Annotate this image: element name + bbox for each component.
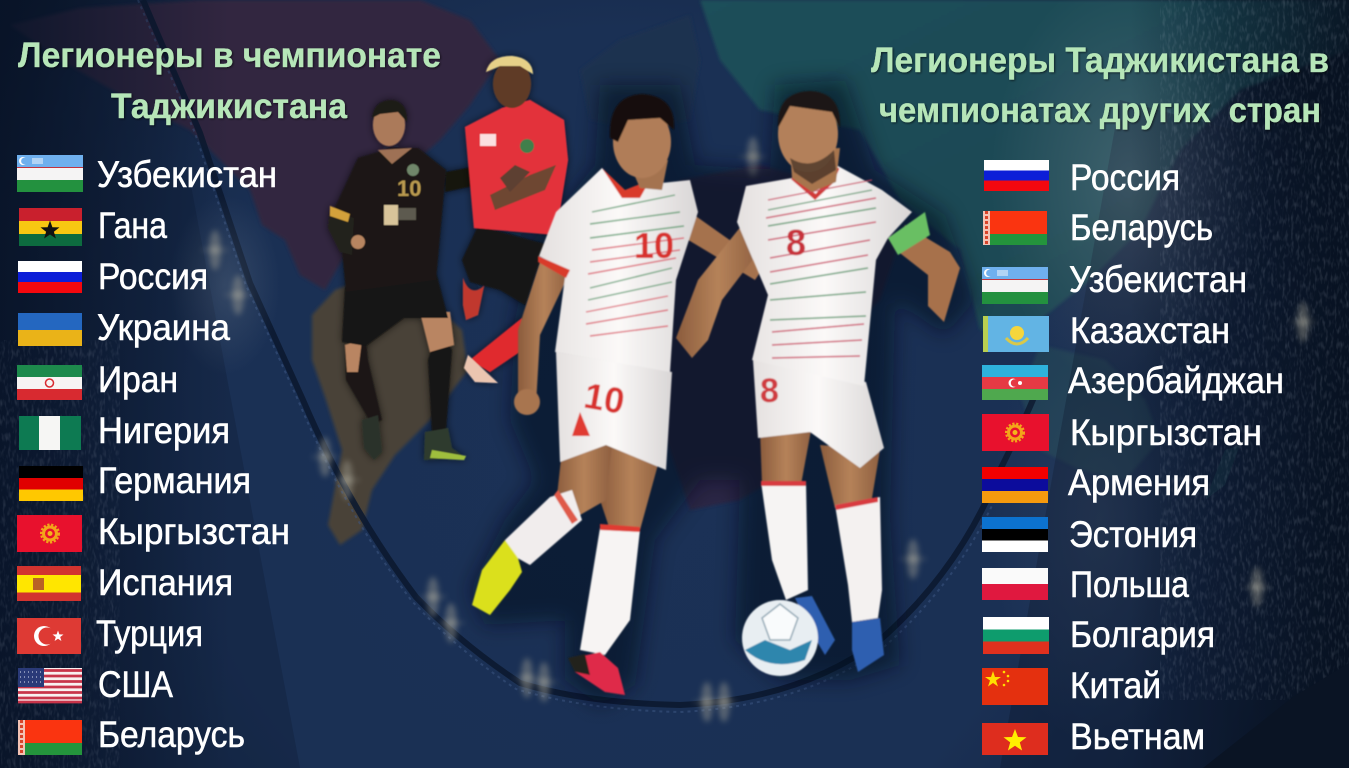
row: Турция: Турция [96, 613, 203, 654]
row: Испания [17, 562, 233, 603]
row: Эстония [982, 514, 1197, 555]
flag: Ukraine [18, 313, 82, 346]
player: red kit [462, 56, 568, 383]
flag: Spain [17, 566, 81, 601]
player: number 8 white kit: 8 [786, 222, 806, 263]
row: Азербайджан: Азербайджан [1068, 360, 1284, 401]
haze [990, 0, 1270, 390]
row: Гана: Гана [98, 205, 167, 246]
row: Китай: Китай [1070, 665, 1161, 706]
row: Казахстан [983, 310, 1230, 352]
row: Болгария [983, 614, 1215, 655]
map: South America [312, 275, 468, 545]
row: Кыргызстан: Кыргызстан [98, 511, 290, 552]
football [742, 600, 818, 676]
flag: Uzbekistan [982, 267, 1048, 304]
row: Узбекистан: Узбекистан [97, 154, 277, 195]
row: Польша: Польша [1070, 564, 1189, 605]
lights [201, 230, 229, 270]
player: number 10 white kit: 10 [581, 375, 628, 422]
flag: Poland [982, 568, 1048, 600]
flag: Russia [18, 261, 82, 293]
row: Беларусь: Беларусь [1070, 207, 1213, 248]
player shadows [470, 80, 975, 705]
row: Германия [19, 460, 251, 501]
flag: Turkey [17, 618, 81, 654]
row: Иран: Иран [98, 359, 178, 400]
flag: Kyrgyzstan [17, 515, 82, 552]
player: number 8 white kit: 8 [760, 372, 779, 410]
row: Турция [17, 613, 203, 654]
row: Украина [18, 307, 230, 348]
row: Кыргызстан [982, 412, 1262, 453]
player: number 10 white kit: 10 [634, 225, 674, 266]
flag: Belarus [983, 211, 1047, 245]
flag: Belarus [18, 720, 82, 755]
row: Вьетнам [982, 716, 1205, 757]
player: black kit: 10 [397, 176, 421, 201]
row: Кыргызстан [17, 511, 290, 552]
beam shapes [0, 180, 300, 768]
row: Гана [19, 205, 167, 246]
map: Asia teal [700, 0, 1349, 330]
player: number 10 white kit [472, 94, 765, 695]
row: Эстония: Эстония [1069, 514, 1197, 555]
row: США: США [98, 664, 173, 705]
row: Беларусь [18, 714, 245, 755]
row: США [18, 664, 173, 705]
flag: Armenia [982, 467, 1048, 503]
row: Беларусь: Беларусь [98, 714, 245, 755]
row: Беларусь [983, 207, 1213, 248]
row: Азербайджан [982, 360, 1284, 401]
row: Россия: Россия [98, 256, 208, 297]
stadium ring [143, 0, 1045, 705]
flag: Ghana [19, 208, 82, 246]
row: Вьетнам: Вьетнам [1070, 716, 1205, 757]
flag: Estonia [982, 517, 1048, 552]
row: Нигерия: Нигерия [98, 410, 230, 451]
player: black kit [328, 100, 510, 460]
flag: Germany [19, 466, 83, 501]
flag: USA [18, 668, 82, 703]
flag: Russia [984, 160, 1049, 191]
player: number 8 white kit [676, 91, 960, 676]
row: Армения [982, 462, 1210, 503]
crowd noise [0, 340, 120, 768]
row: Армения: Армения [1068, 462, 1210, 503]
flag: Bulgaria [983, 617, 1049, 654]
flag: Nigeria [19, 416, 81, 450]
row: Россия: Россия [1070, 157, 1180, 198]
row: Болгария: Болгария [1070, 614, 1215, 655]
row: Узбекистан [982, 259, 1247, 304]
flag: Vietnam [982, 723, 1048, 755]
lower right corner [1203, 663, 1349, 768]
map: North America [10, 0, 500, 290]
map: Oceania [1020, 345, 1160, 480]
map: Africa and Middle East [640, 165, 900, 510]
row: Узбекистан [17, 154, 277, 195]
row: Узбекистан: Узбекистан [1069, 259, 1247, 300]
flag: Uzbekistan [17, 155, 83, 192]
row: Китай [982, 665, 1161, 706]
heading: left: Таджикистана [111, 87, 348, 126]
row: Польша [982, 564, 1189, 605]
row: Нигерия [19, 410, 230, 451]
row: Кыргызстан: Кыргызстан [1070, 412, 1262, 453]
flag: Kyrgyzstan [982, 414, 1049, 451]
row: Германия: Германия [98, 460, 251, 501]
flag: Iran [17, 365, 82, 400]
row: Иран [17, 359, 178, 400]
list: left column countries [17, 154, 290, 755]
heading: right [871, 41, 1329, 130]
heading: left [18, 36, 441, 126]
flag: China [982, 668, 1048, 705]
flag: Kazakhstan [983, 316, 1049, 352]
row: Казахстан: Казахстан [1070, 310, 1230, 351]
row: Россия [984, 157, 1180, 198]
row: Россия [18, 256, 208, 297]
row: Украина: Украина [97, 307, 230, 348]
heading: left: Легионеры в чемпионате [18, 36, 441, 75]
heading: right: чемпионатах других стран [879, 91, 1321, 130]
row: Испания: Испания [98, 562, 233, 603]
list: right column countries [982, 157, 1284, 757]
heading: right: Легионеры Таджикистана в [871, 41, 1329, 80]
flag: Azerbaijan [982, 365, 1048, 400]
map: Europe [580, 15, 700, 130]
